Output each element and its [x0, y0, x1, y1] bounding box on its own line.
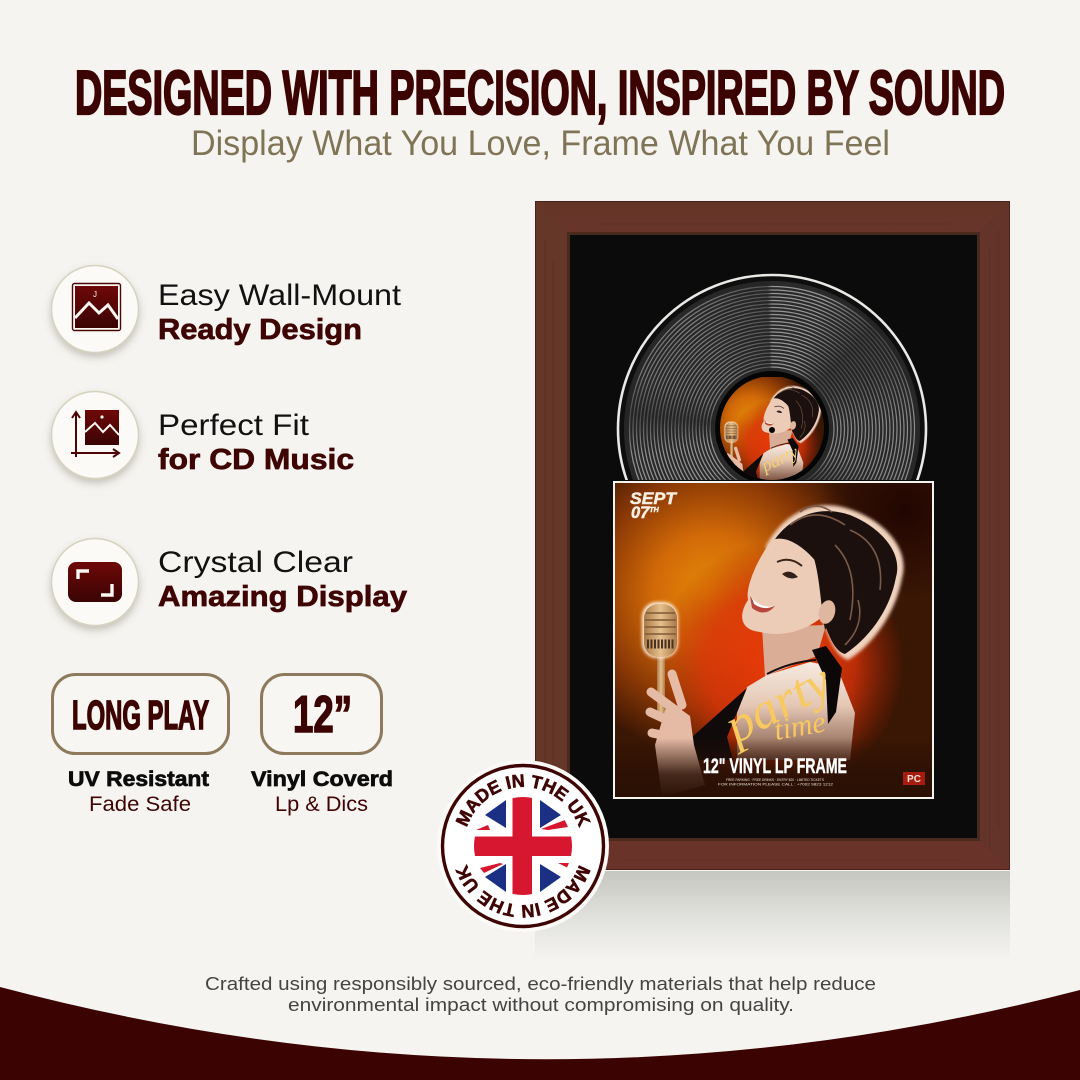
badge: 12 inch — [251, 674, 393, 816]
record label: party — [756, 441, 801, 476]
footer note — [205, 974, 876, 1015]
feature: perfect fit — [52, 392, 354, 478]
album date — [630, 492, 678, 518]
made in the UK seal — [440, 760, 609, 931]
subtitle: Display What You Love, Frame What You Feel — [191, 124, 890, 163]
badge: long play: UV Resistant — [68, 768, 209, 791]
album cover — [613, 481, 934, 799]
feature: wall-mount: Easy Wall-Mount — [158, 279, 402, 312]
album script: party — [712, 651, 841, 755]
footer note: environmental impact without compromising on quality. — [288, 995, 794, 1015]
album date: 07 — [631, 504, 649, 522]
album small print: FREE PARKING · FREE DRINKS · ENTRY $20 · LIMITED TICKETS — [726, 778, 825, 782]
picture frame — [535, 201, 1010, 870]
badge: 12 inch: Vinyl Coverd — [251, 768, 393, 791]
album date: SEPT — [630, 490, 678, 508]
footer note: Crafted using responsibly sourced, eco-friendly materials that help reduce — [205, 974, 876, 994]
icon: picture with dimension arrows — [52, 392, 138, 478]
album logo: PC — [907, 774, 921, 785]
black mat — [567, 232, 980, 841]
icon: display with corner marks — [52, 538, 138, 626]
feature: crystal clear: Amazing Display — [158, 581, 407, 613]
seal ring text top: MADE IN THE UK — [455, 774, 591, 828]
badge: long play — [52, 674, 228, 816]
album headline: 12" VINYL LP FRAME — [703, 755, 847, 778]
album small print: FOR INFORMATION PLEASE CALL : +7002 9823 1212 — [718, 782, 833, 786]
badge: long play: Fade Safe — [89, 793, 191, 816]
album date: TH — [649, 507, 660, 514]
badge: long play: LONG PLAY — [72, 692, 209, 738]
frame reflection — [535, 871, 1010, 961]
badge: 12 inch: Lp & Dics — [275, 793, 368, 816]
record label — [715, 371, 829, 480]
album script — [728, 672, 826, 755]
album logo — [903, 772, 925, 785]
seal ring text bottom: MADE IN THE UK — [455, 864, 591, 918]
bottom curved band — [0, 987, 1080, 1080]
feature: perfect fit: for CD Music — [158, 444, 354, 476]
feature: crystal clear — [52, 538, 407, 626]
feature: wall-mount: Ready Design — [158, 314, 362, 346]
badge: 12 inch: 12” — [293, 686, 352, 744]
vinyl record — [616, 274, 928, 480]
icon: framed picture for wall mounting: J — [93, 290, 97, 299]
icon: framed picture for wall mounting — [52, 266, 138, 352]
album script: time — [771, 705, 828, 747]
UK flag — [474, 797, 572, 895]
album small print — [718, 778, 833, 786]
wooden frame — [535, 201, 1010, 870]
feature: perfect fit: Perfect Fit — [158, 409, 310, 442]
feature: crystal clear: Crystal Clear — [158, 546, 353, 579]
feature: wall-mount — [52, 266, 402, 352]
